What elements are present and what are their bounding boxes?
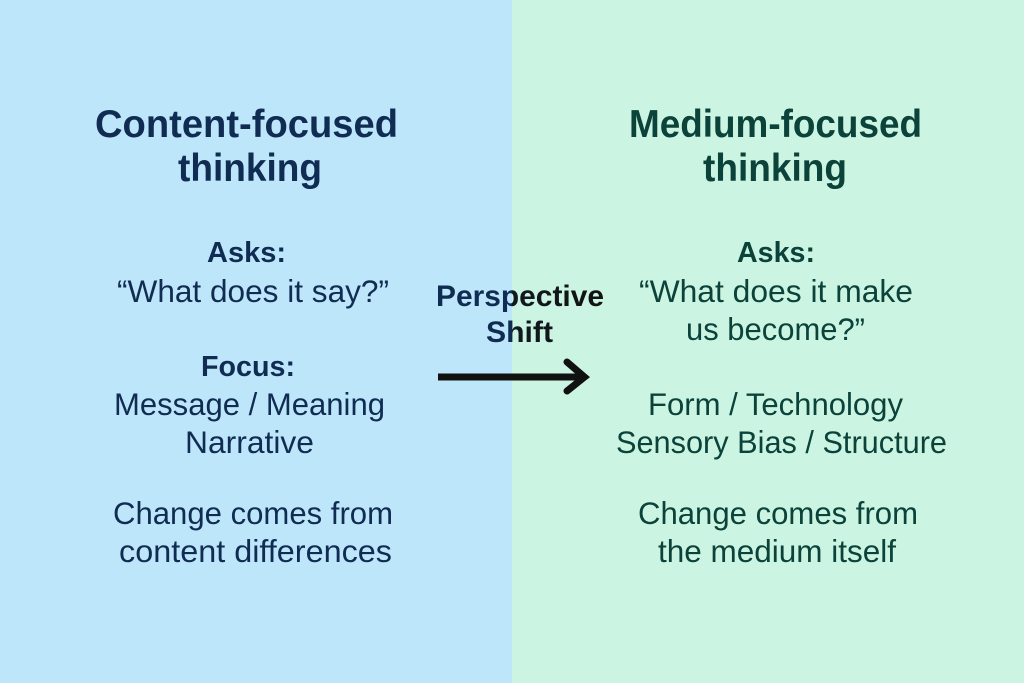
label: perspective shift: Shift [486,316,553,349]
panel: medium-focused thinking [512,0,1024,683]
heading: content-focused thinking [95,103,398,190]
text block: source of change [113,495,393,569]
text block: form and structure [616,386,947,460]
panel: content-focused thinking [0,0,512,683]
text block: focus: Message / Meaning [114,386,385,422]
text block: asks: Asks: [737,237,815,269]
text block: form and structure: Form / Technology [648,386,903,422]
text block: form and structure: Sensory Bias / Structure [616,424,947,460]
text block: focus: Focus: [201,351,295,383]
text block: source of change: Change comes from [113,495,393,531]
text block: source of change: the medium itself [658,533,896,569]
heading: content-focused thinking: thinking [178,147,322,190]
text block: asks [117,237,389,309]
text block: asks: us become?” [686,311,865,347]
arrow: perspective shift [438,362,584,391]
label: perspective shift [436,280,604,349]
text block: focus: Narrative [185,424,314,460]
text block: asks: “What does it say?” [117,273,389,309]
text block: asks [639,237,913,347]
label: perspective shift: Perspective [436,280,604,313]
heading: medium-focused thinking: thinking [703,147,847,190]
text block: asks: “What does it make [639,273,913,309]
heading: medium-focused thinking [629,103,922,190]
text block: focus [114,351,385,460]
text block: source of change: Change comes from [638,495,918,531]
text block: source of change: content differences [119,533,392,569]
heading: medium-focused thinking: Medium-focused [629,103,922,146]
text block: asks: Asks: [207,237,286,269]
heading: content-focused thinking: Content-focused [95,103,398,146]
text block: source of change [638,495,918,569]
